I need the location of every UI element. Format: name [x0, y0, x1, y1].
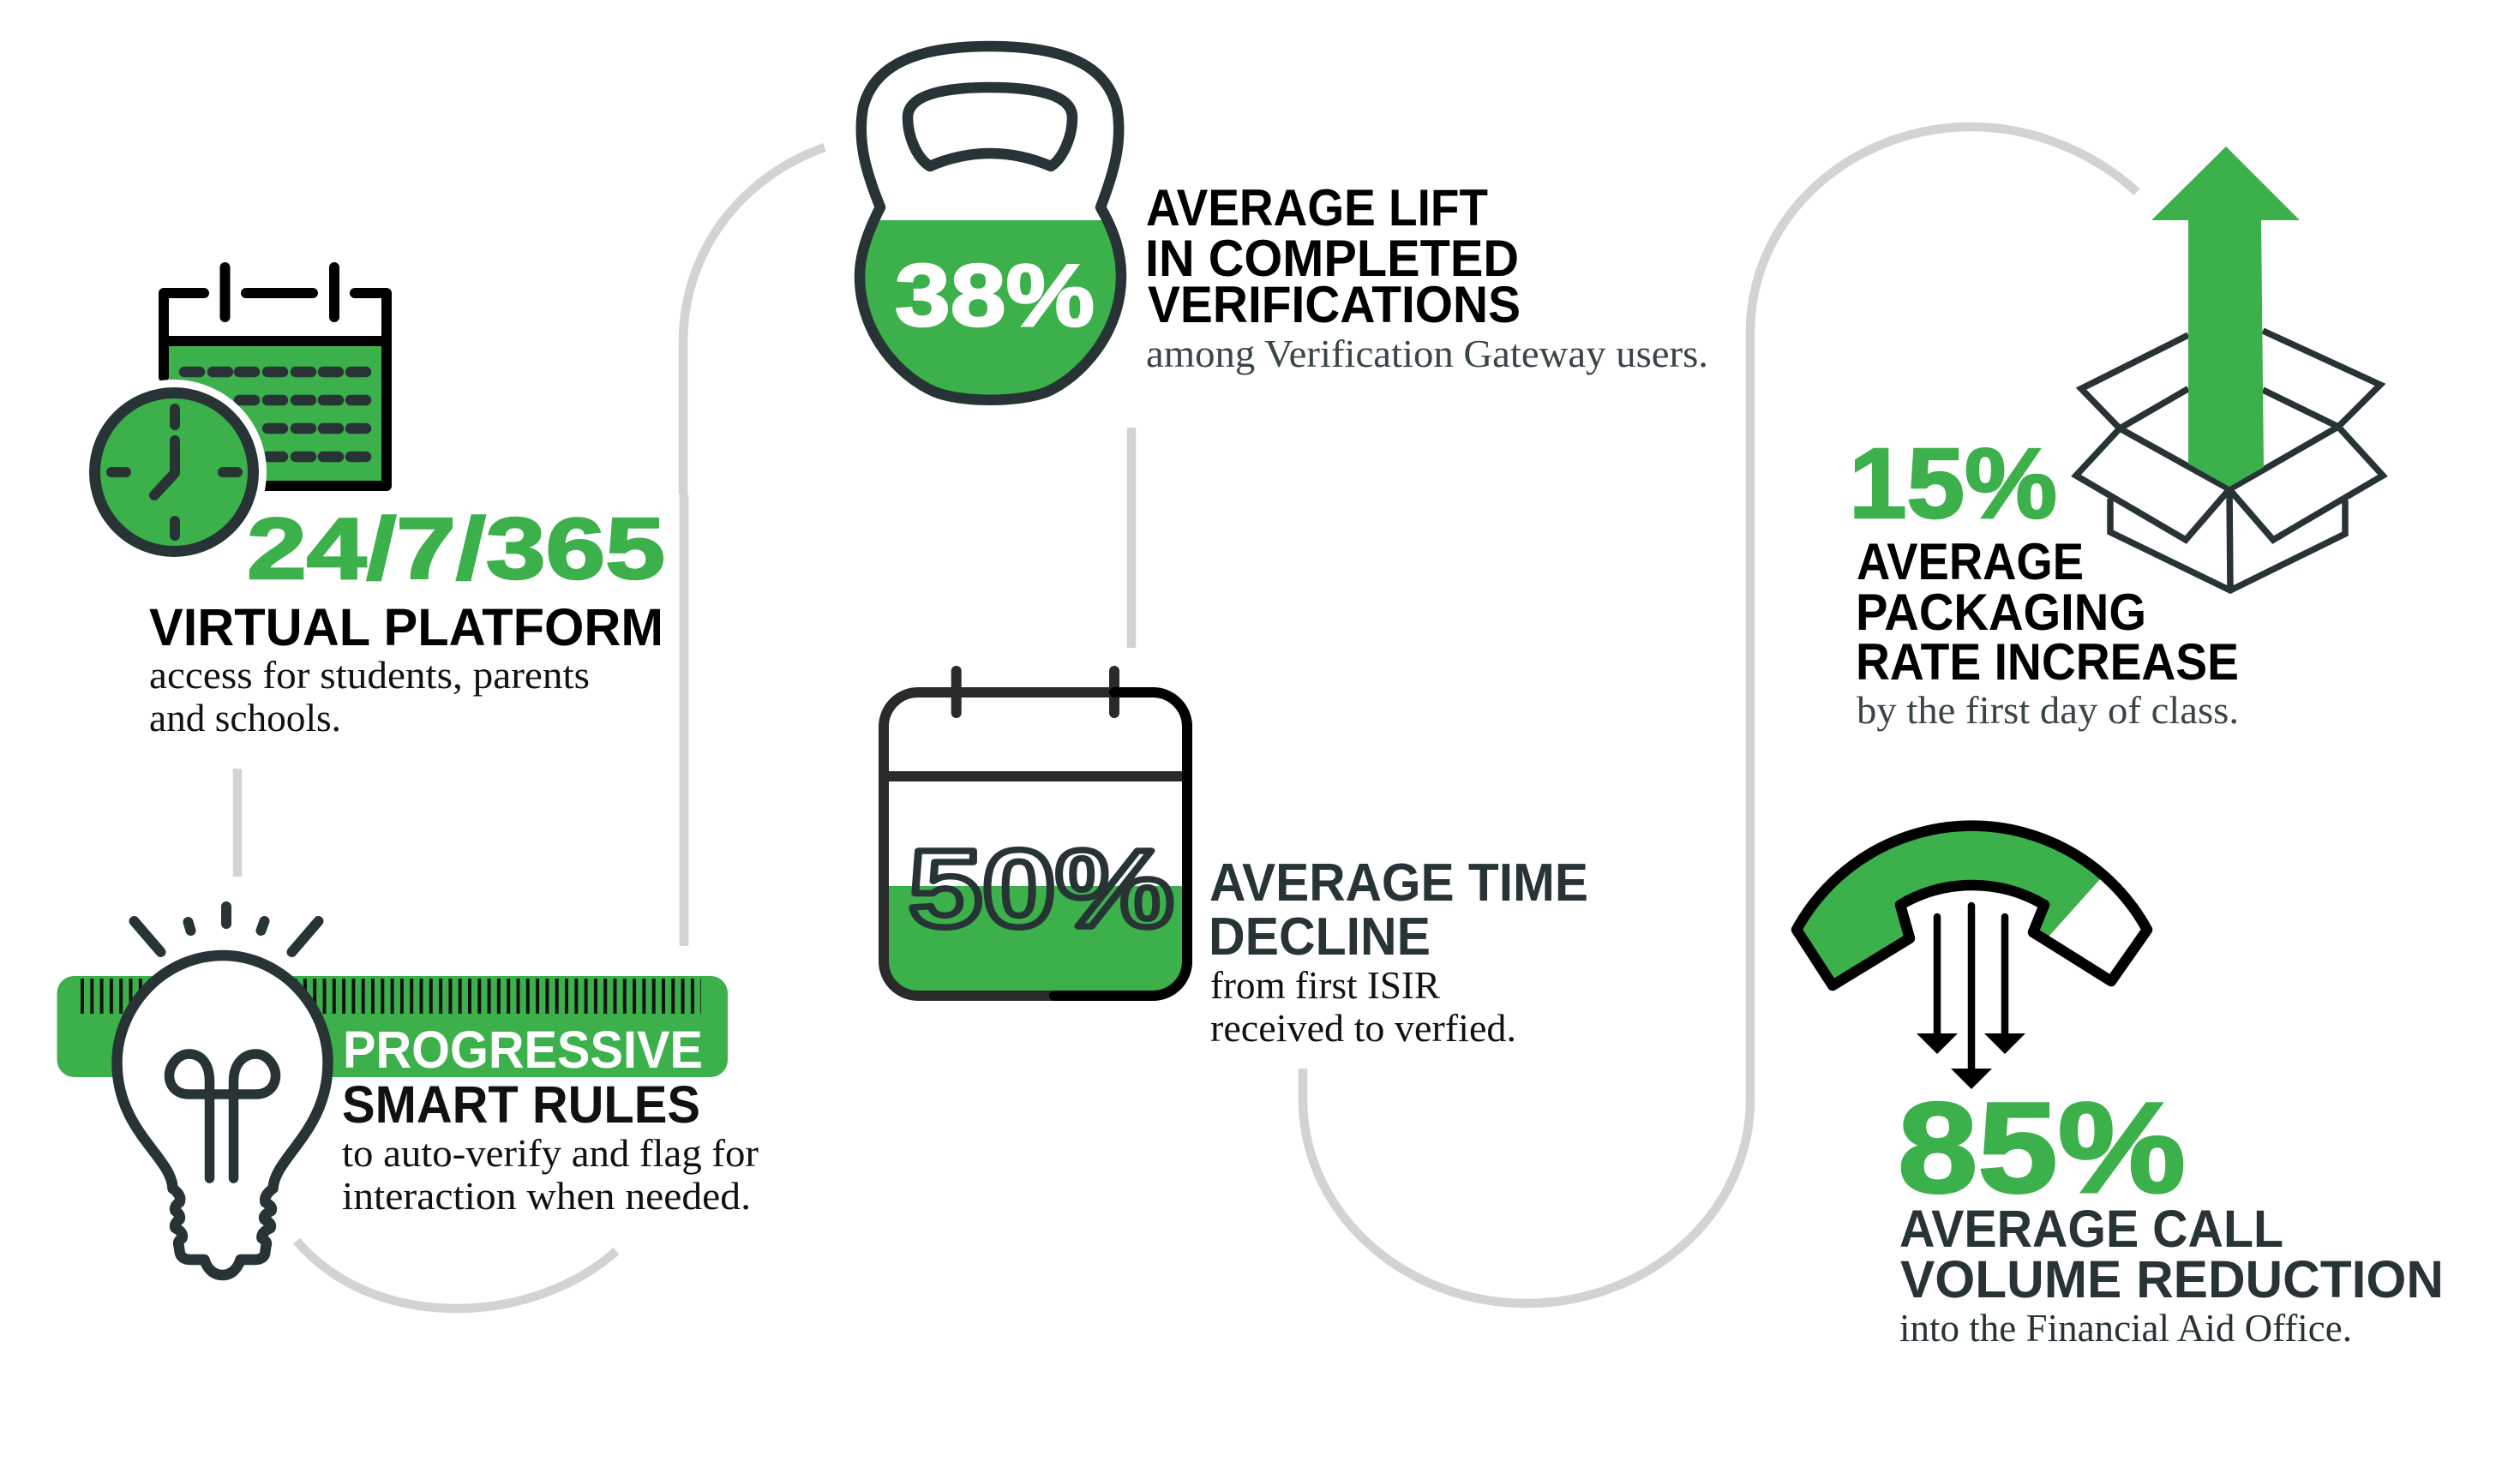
panel: average time decline [884, 671, 1588, 1050]
description: isir: received to verfied. [1210, 1006, 1516, 1050]
description: isir [1210, 963, 1516, 1050]
icon: up arrow [2151, 147, 2300, 487]
stat: 15%: 15% [1849, 428, 2057, 539]
description: auto-verify [342, 1131, 759, 1218]
icon: kettlebell [860, 46, 1121, 400]
description: access: access for students, parents [149, 653, 590, 697]
heading: packaging rate: PACKAGING [1856, 584, 2146, 641]
heading: call volume: AVERAGE CALL [1899, 1200, 2283, 1258]
description: access [149, 653, 590, 739]
heading: call volume: VOLUME REDUCTION [1900, 1250, 2444, 1308]
panel: call volume [1797, 826, 2444, 1350]
heading: average lift: AVERAGE LIFT [1146, 179, 1488, 237]
heading: packaging rate: AVERAGE [1857, 533, 2084, 590]
heading: average time decline [1209, 853, 1588, 967]
icon: wall calendar [164, 267, 387, 486]
heading: smart rules: SMART RULES [342, 1075, 700, 1134]
connector paths [237, 127, 2137, 1308]
stat: 38%: 38% [895, 246, 1095, 344]
icon: open box [2076, 331, 2383, 590]
heading: packaging rate [1856, 533, 2239, 691]
icon: calendar with fill [884, 671, 1187, 996]
icon: light bulb [117, 907, 327, 1275]
description: financial aid: into the Financial Aid Office. [1899, 1306, 2352, 1350]
heading: average lift: IN COMPLETED [1145, 230, 1519, 287]
panel: packaging rate [1849, 147, 2383, 732]
stat: 50%: 50% [909, 828, 1173, 950]
panel: virtual platform [81, 267, 665, 739]
heading: average time decline: DECLINE [1209, 907, 1431, 967]
icon: phone handset [1797, 826, 2147, 985]
heading: average lift [1145, 179, 1521, 333]
panel: average lift [860, 46, 1708, 400]
heading: call volume [1899, 1200, 2444, 1308]
stat: 85%: 85% [1898, 1075, 2186, 1219]
description: isir: from first ISIR [1210, 963, 1440, 1007]
icon: clock [81, 380, 267, 565]
stat: 24/7/365: 24/7/365 [247, 501, 665, 597]
heading: average lift: VERIFICATIONS [1148, 276, 1521, 333]
heading: virtual platform: VIRTUAL PLATFORM [149, 598, 663, 656]
description: access: and schools. [149, 696, 341, 739]
heading: packaging rate: RATE INCREASE [1856, 633, 2239, 691]
description: auto-verify: interaction when needed. [342, 1174, 751, 1218]
heading: average time decline: AVERAGE TIME [1209, 853, 1588, 913]
description: auto-verify: to auto-verify and flag for [342, 1131, 759, 1175]
description: gateway users: among Verification Gateway users. [1146, 332, 1708, 375]
description: first day: by the first day of class. [1857, 688, 2239, 732]
panel: smart rules [57, 907, 759, 1275]
icon: down arrows [1917, 906, 2025, 1089]
heading: progressive: PROGRESSIVE [343, 1021, 703, 1079]
green banner [57, 976, 728, 1077]
